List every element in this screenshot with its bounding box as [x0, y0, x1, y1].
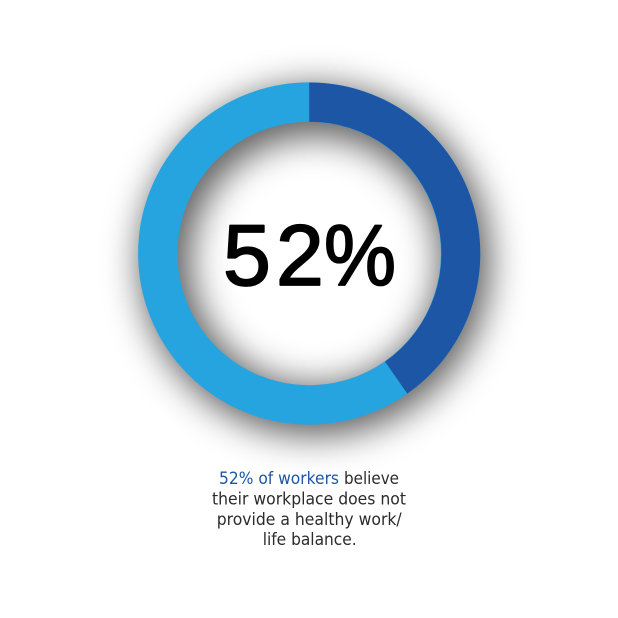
light blue ring segment [158, 102, 461, 405]
donut chart [158, 82, 480, 405]
donut drop shadow [165, 111, 465, 411]
caption line 1: believe [344, 469, 399, 488]
center percentage: % [324, 208, 396, 304]
caption line 1: 52% of workers [219, 469, 339, 488]
dark blue ring segment [309, 82, 480, 394]
caption line 4: life balance. [263, 530, 357, 549]
center percentage: 5 [223, 208, 271, 304]
caption line 2: their workplace does not [212, 490, 406, 508]
caption [212, 469, 406, 549]
center percentage: 2 [276, 208, 324, 304]
caption line 3: provide a healthy work/ [217, 510, 402, 529]
